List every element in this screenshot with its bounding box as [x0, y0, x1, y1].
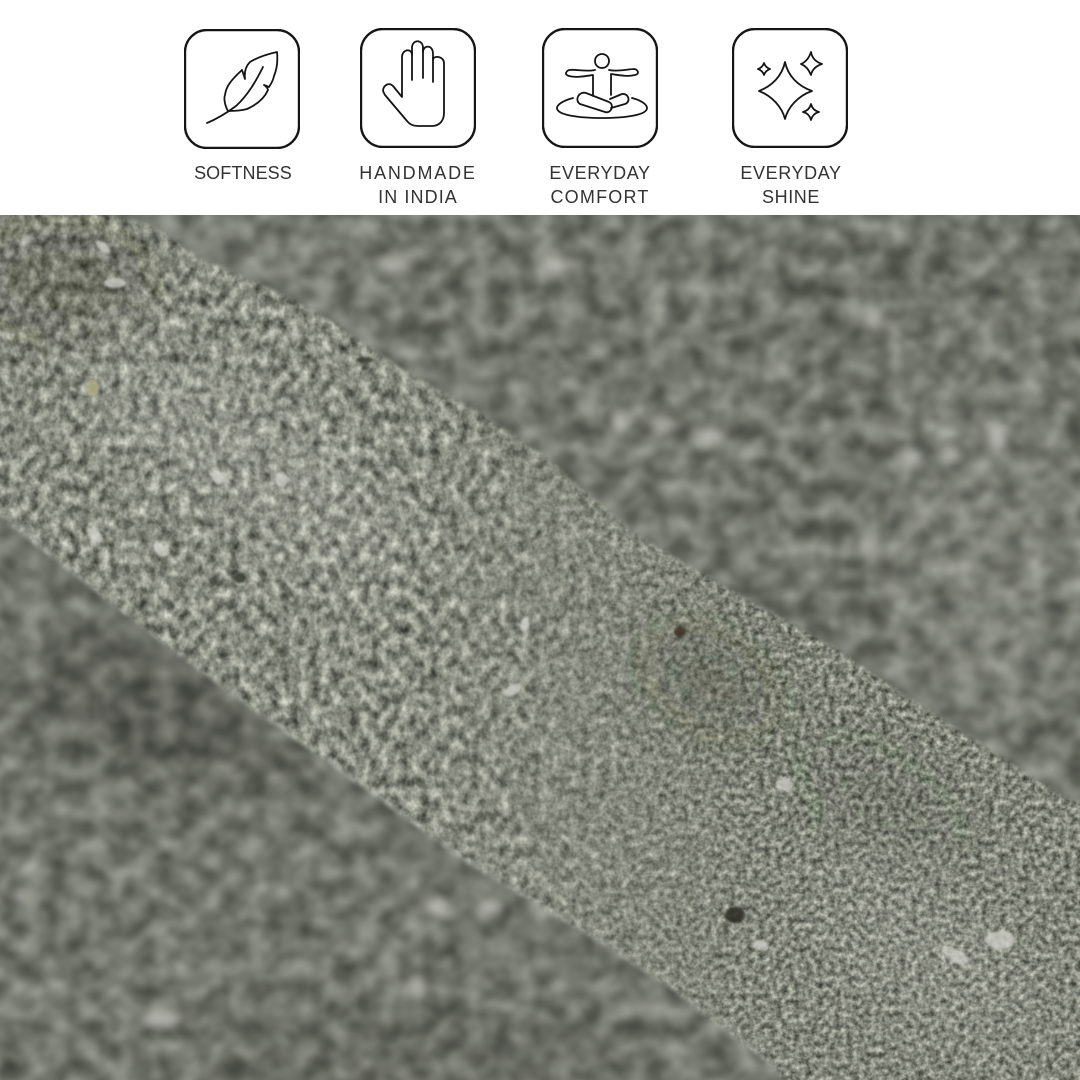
label: handmade in india: IN INDIA [378, 187, 458, 207]
label: everyday shine [740, 163, 842, 207]
icon: hand [360, 28, 476, 148]
label: everyday comfort: COMFORT [550, 187, 650, 207]
icon: feather [184, 29, 300, 149]
label: softness: SOFTNESS [194, 163, 292, 183]
label: everyday shine: EVERYDAY [740, 163, 842, 183]
light rim on lower edge [0, 515, 773, 1073]
icon: meditation [542, 28, 658, 148]
icon: sparkles [732, 28, 848, 148]
label: handmade in india [359, 163, 477, 207]
label: everyday comfort: EVERYDAY [549, 163, 651, 183]
label: everyday shine: SHINE [762, 187, 820, 207]
label: handmade in india: HANDMADE [359, 163, 477, 183]
label: everyday comfort [549, 163, 651, 207]
